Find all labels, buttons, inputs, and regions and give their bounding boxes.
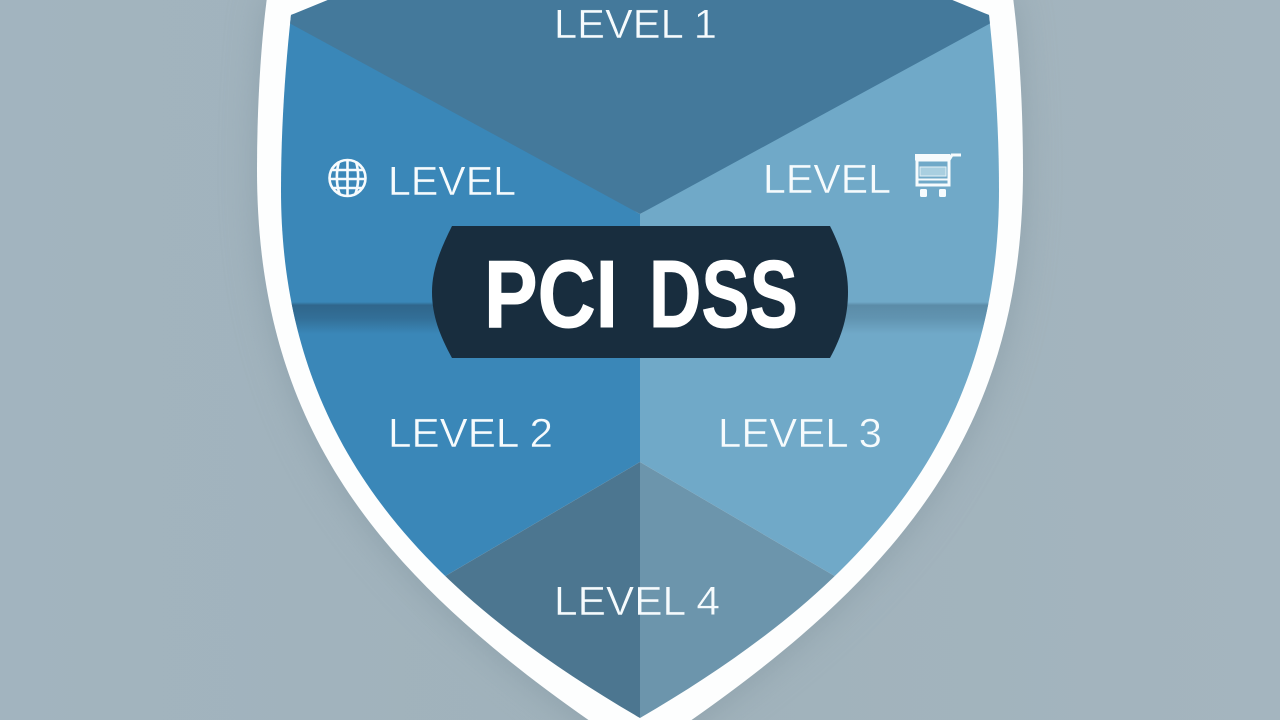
segment: level 4 right	[640, 462, 835, 718]
label: level 1: LEVEL 1	[554, 1, 717, 47]
segment: level right	[640, 0, 1010, 585]
horizontal fold band right	[843, 303, 988, 329]
segment: level 1	[280, 0, 1000, 214]
icon: globe	[330, 160, 366, 196]
shield white border	[257, 0, 1023, 720]
label: level 4: LEVEL 4	[554, 578, 720, 624]
label: level right: LEVEL	[763, 156, 891, 202]
horizontal fold band left	[292, 302, 438, 330]
segment: level 4 left	[445, 462, 640, 718]
label: level 3: LEVEL 3	[718, 410, 882, 456]
center badge	[432, 226, 848, 358]
title	[484, 241, 798, 348]
label: level 2: LEVEL 2	[388, 410, 553, 456]
label: level left: LEVEL	[388, 158, 516, 204]
title: PCI	[484, 241, 618, 348]
segment: level left	[270, 0, 640, 585]
title: DSS	[649, 241, 798, 348]
shield drop shadow	[257, 0, 1023, 720]
shield segments	[270, 0, 1010, 720]
icon: shopping cart	[915, 154, 961, 197]
panel: shield	[257, 0, 1023, 720]
